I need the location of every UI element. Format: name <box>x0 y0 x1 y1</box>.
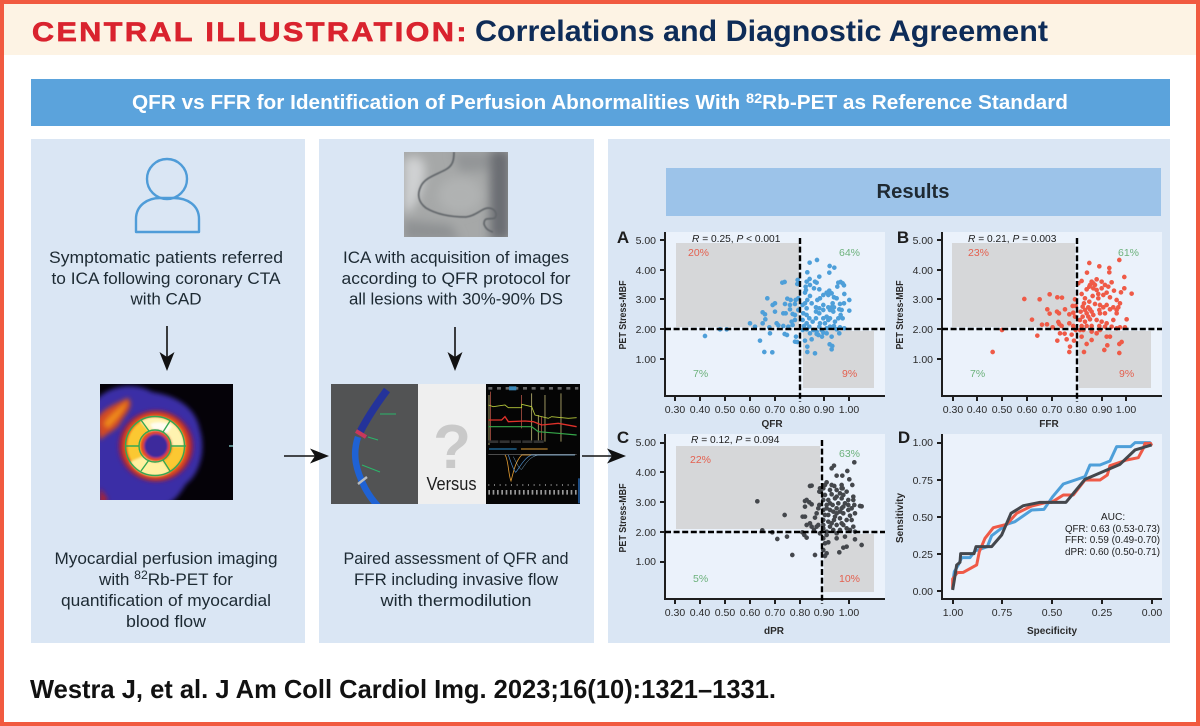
text: ICA acquisition: according to QFR protocol for <box>342 269 571 288</box>
curve: QFR <box>953 443 1152 588</box>
AUC legend <box>1065 512 1160 558</box>
text: paired assessment <box>344 549 568 610</box>
stats and percentages: 9% <box>1119 368 1134 380</box>
curve: FFR <box>953 443 1152 589</box>
arrow: panel 1 to panel 2 <box>284 448 329 464</box>
points <box>993 260 1132 353</box>
axis labels: 4.00 <box>913 265 933 277</box>
axis labels: 4.00 <box>636 265 656 277</box>
axis labels: 0.80 <box>1067 404 1087 416</box>
axis labels: PET Stress-MBF <box>618 280 629 350</box>
axis labels: 3.00 <box>913 294 933 306</box>
text: ICA acquisition <box>342 248 571 308</box>
banner: QFR vs FFR for Identification of Perfusion Abnormalities With <box>132 92 718 114</box>
panel letter C: C <box>617 428 629 447</box>
axis labels: 0.50 <box>715 607 735 619</box>
text: paired assessment: with thermodilution <box>379 591 532 610</box>
text: myocardial perfusion imaging: Rb-PET for <box>148 570 233 589</box>
icon: patient <box>136 159 199 232</box>
AUC legend: FFR: 0.59 (0.49-0.70) <box>1065 535 1160 546</box>
text: symptomatic patients <box>49 248 283 308</box>
text: symptomatic patients: with CAD <box>129 290 202 308</box>
image: coronary angiogram <box>404 150 510 240</box>
axis labels: FFR <box>1039 419 1059 430</box>
axis labels: 0.60 <box>1017 404 1037 416</box>
axis labels: 0.70 <box>765 607 785 619</box>
heading: results: Results <box>876 181 950 203</box>
stats and percentages <box>968 234 1139 380</box>
axis labels: 1.00 <box>636 354 656 366</box>
segment outlines <box>125 416 186 476</box>
axis labels <box>618 235 859 430</box>
axis labels: 1.00 <box>839 607 859 619</box>
banner: Rb-PET as Reference Standard <box>762 92 1068 114</box>
points <box>705 260 849 353</box>
axis labels: 0.40 <box>967 404 987 416</box>
panel letter A: A <box>617 228 629 247</box>
axis labels: 0.30 <box>665 404 685 416</box>
axis labels: 0.25 <box>913 549 933 561</box>
stats and percentages: 64% <box>839 247 860 259</box>
text: ICA acquisition: ICA with acquisition of images <box>343 248 569 267</box>
panel: results <box>608 139 1170 643</box>
curve: dPR <box>953 445 1152 590</box>
stats and percentages: 63% <box>839 448 860 460</box>
citation: Westra J, et al. J Am Coll Cardiol Img. 2023;16(10):1321–1331. <box>30 674 776 704</box>
stats and percentages: 23% <box>968 247 989 259</box>
image: versus placeholder <box>418 384 486 504</box>
AUC legend: dPR: 0.60 (0.50-0.71) <box>1065 547 1160 558</box>
axis labels: QFR <box>761 419 783 430</box>
axis labels: 5.00 <box>636 437 656 449</box>
text: symptomatic patients: to ICA following coronary CTA <box>52 269 281 288</box>
axis labels: 0.80 <box>790 404 810 416</box>
text: myocardial perfusion imaging: blood flow <box>126 612 207 631</box>
axis labels: 0.90 <box>814 404 834 416</box>
axis labels: 0.25 <box>1092 607 1112 619</box>
axis labels: 1.00 <box>913 354 933 366</box>
axis labels: 1.00 <box>636 556 656 568</box>
axis labels <box>895 235 1136 430</box>
axis labels: 2.00 <box>913 324 933 336</box>
vessel <box>419 152 496 232</box>
text: myocardial perfusion imaging: with <box>99 570 129 589</box>
axis labels: Specificity <box>1027 626 1077 637</box>
panel: invasive assessment <box>319 139 594 643</box>
title: central illustration: CENTRAL ILLUSTRATION: <box>32 17 469 47</box>
axis labels: 5.00 <box>636 235 656 247</box>
stats and percentages: 7% <box>693 368 708 380</box>
text: symptomatic patients: Symptomatic patients referred <box>49 248 283 267</box>
axis labels: 1.00 <box>1116 404 1136 416</box>
axis labels: 0.90 <box>814 607 834 619</box>
panel letter D: D <box>898 428 910 447</box>
arrow: panel 2 to results <box>582 448 626 464</box>
text: paired assessment: Paired assessment of QFR and <box>344 549 568 568</box>
stats and percentages: 5% <box>693 573 708 585</box>
stats and percentages <box>688 234 860 380</box>
label: versus: Versus <box>426 473 476 494</box>
stats and percentages: 7% <box>970 368 985 380</box>
text: myocardial perfusion imaging <box>54 549 278 631</box>
stats and percentages <box>690 435 860 585</box>
stats and percentages: R = 0.21, P = 0.003 <box>968 234 1057 245</box>
stats and percentages: 10% <box>839 573 860 585</box>
points <box>757 462 862 556</box>
header band <box>4 4 1196 55</box>
axis labels: 0.50 <box>992 404 1012 416</box>
axis labels: 3.00 <box>636 497 656 509</box>
text: paired assessment: FFR including invasive flow <box>354 570 559 589</box>
axis labels: 1.00 <box>943 607 963 619</box>
axis labels: 0.50 <box>913 512 933 524</box>
axis labels: 0.50 <box>1042 607 1062 619</box>
axis labels: 0.70 <box>765 404 785 416</box>
axis labels <box>618 437 859 637</box>
axis labels: 0.75 <box>992 607 1012 619</box>
stats and percentages: 61% <box>1118 247 1139 259</box>
axis labels: 0.90 <box>1092 404 1112 416</box>
axis labels: 0.70 <box>1042 404 1062 416</box>
axis labels: 0.00 <box>1142 607 1162 619</box>
curves <box>953 443 1152 590</box>
stats and percentages: R = 0.25, P < 0.001 <box>692 234 781 245</box>
text: ICA acquisition: all lesions with 30%-90% DS <box>349 290 563 308</box>
axis labels: 1.00 <box>839 404 859 416</box>
axis labels: 0.30 <box>943 404 963 416</box>
chart B: FFR scatter <box>895 228 1162 430</box>
AUC legend: QFR: 0.63 (0.53-0.73) <box>1065 524 1160 535</box>
stats and percentages: R = 0.12, P = 0.094 <box>691 435 780 446</box>
axis labels: PET Stress-MBF <box>895 280 906 350</box>
chart C: dPR scatter <box>617 428 885 637</box>
stats and percentages: 20% <box>688 247 709 259</box>
panel: patient population <box>31 139 305 643</box>
panel letter B: B <box>897 228 909 247</box>
text: myocardial perfusion imaging: Myocardial perfusion imaging <box>54 549 278 568</box>
axis labels: 0.00 <box>913 586 933 598</box>
axis labels: 0.50 <box>715 404 735 416</box>
axis labels: 0.60 <box>740 404 760 416</box>
title: correlations and diagnostic agreement: Correlations and Diagnostic Agreement <box>475 15 1048 48</box>
image: PET perfusion polar map <box>100 384 233 500</box>
AUC legend: AUC: <box>1101 512 1125 523</box>
axis labels: 0.30 <box>665 607 685 619</box>
axis labels: 0.80 <box>790 607 810 619</box>
axis labels: 0.40 <box>690 607 710 619</box>
axis labels: 0.75 <box>913 475 933 487</box>
arrow: down to PET <box>160 326 174 371</box>
axis labels: 0.60 <box>740 607 760 619</box>
image: QFR vessel model <box>331 384 418 506</box>
axis labels: 2.00 <box>636 527 656 539</box>
stats and percentages: 22% <box>690 454 711 466</box>
heading: results <box>666 168 1161 216</box>
text: myocardial perfusion imaging: 82 <box>134 568 148 582</box>
axis labels: dPR <box>764 626 785 637</box>
axis labels: 0.40 <box>690 404 710 416</box>
axis labels <box>895 437 1162 637</box>
axis labels: 3.00 <box>636 294 656 306</box>
axis labels: PET Stress-MBF <box>618 484 629 552</box>
text: myocardial perfusion imaging: quantification of myocardial <box>61 591 271 610</box>
image: pressure tracing <box>486 384 580 504</box>
axis labels: Sensitivity <box>895 493 906 543</box>
chart D: ROC curves <box>895 428 1162 637</box>
icon: question mark: ? <box>433 413 471 482</box>
axis labels: 4.00 <box>636 467 656 479</box>
arrow: down to comparison <box>448 327 462 371</box>
banner <box>31 79 1170 126</box>
banner: 82 <box>746 90 762 106</box>
axis labels: 2.00 <box>636 324 656 336</box>
stats and percentages: 9% <box>842 368 857 380</box>
axis labels: 5.00 <box>913 235 933 247</box>
axis labels: 1.00 <box>913 437 933 449</box>
chart A: QFR scatter <box>617 228 885 430</box>
